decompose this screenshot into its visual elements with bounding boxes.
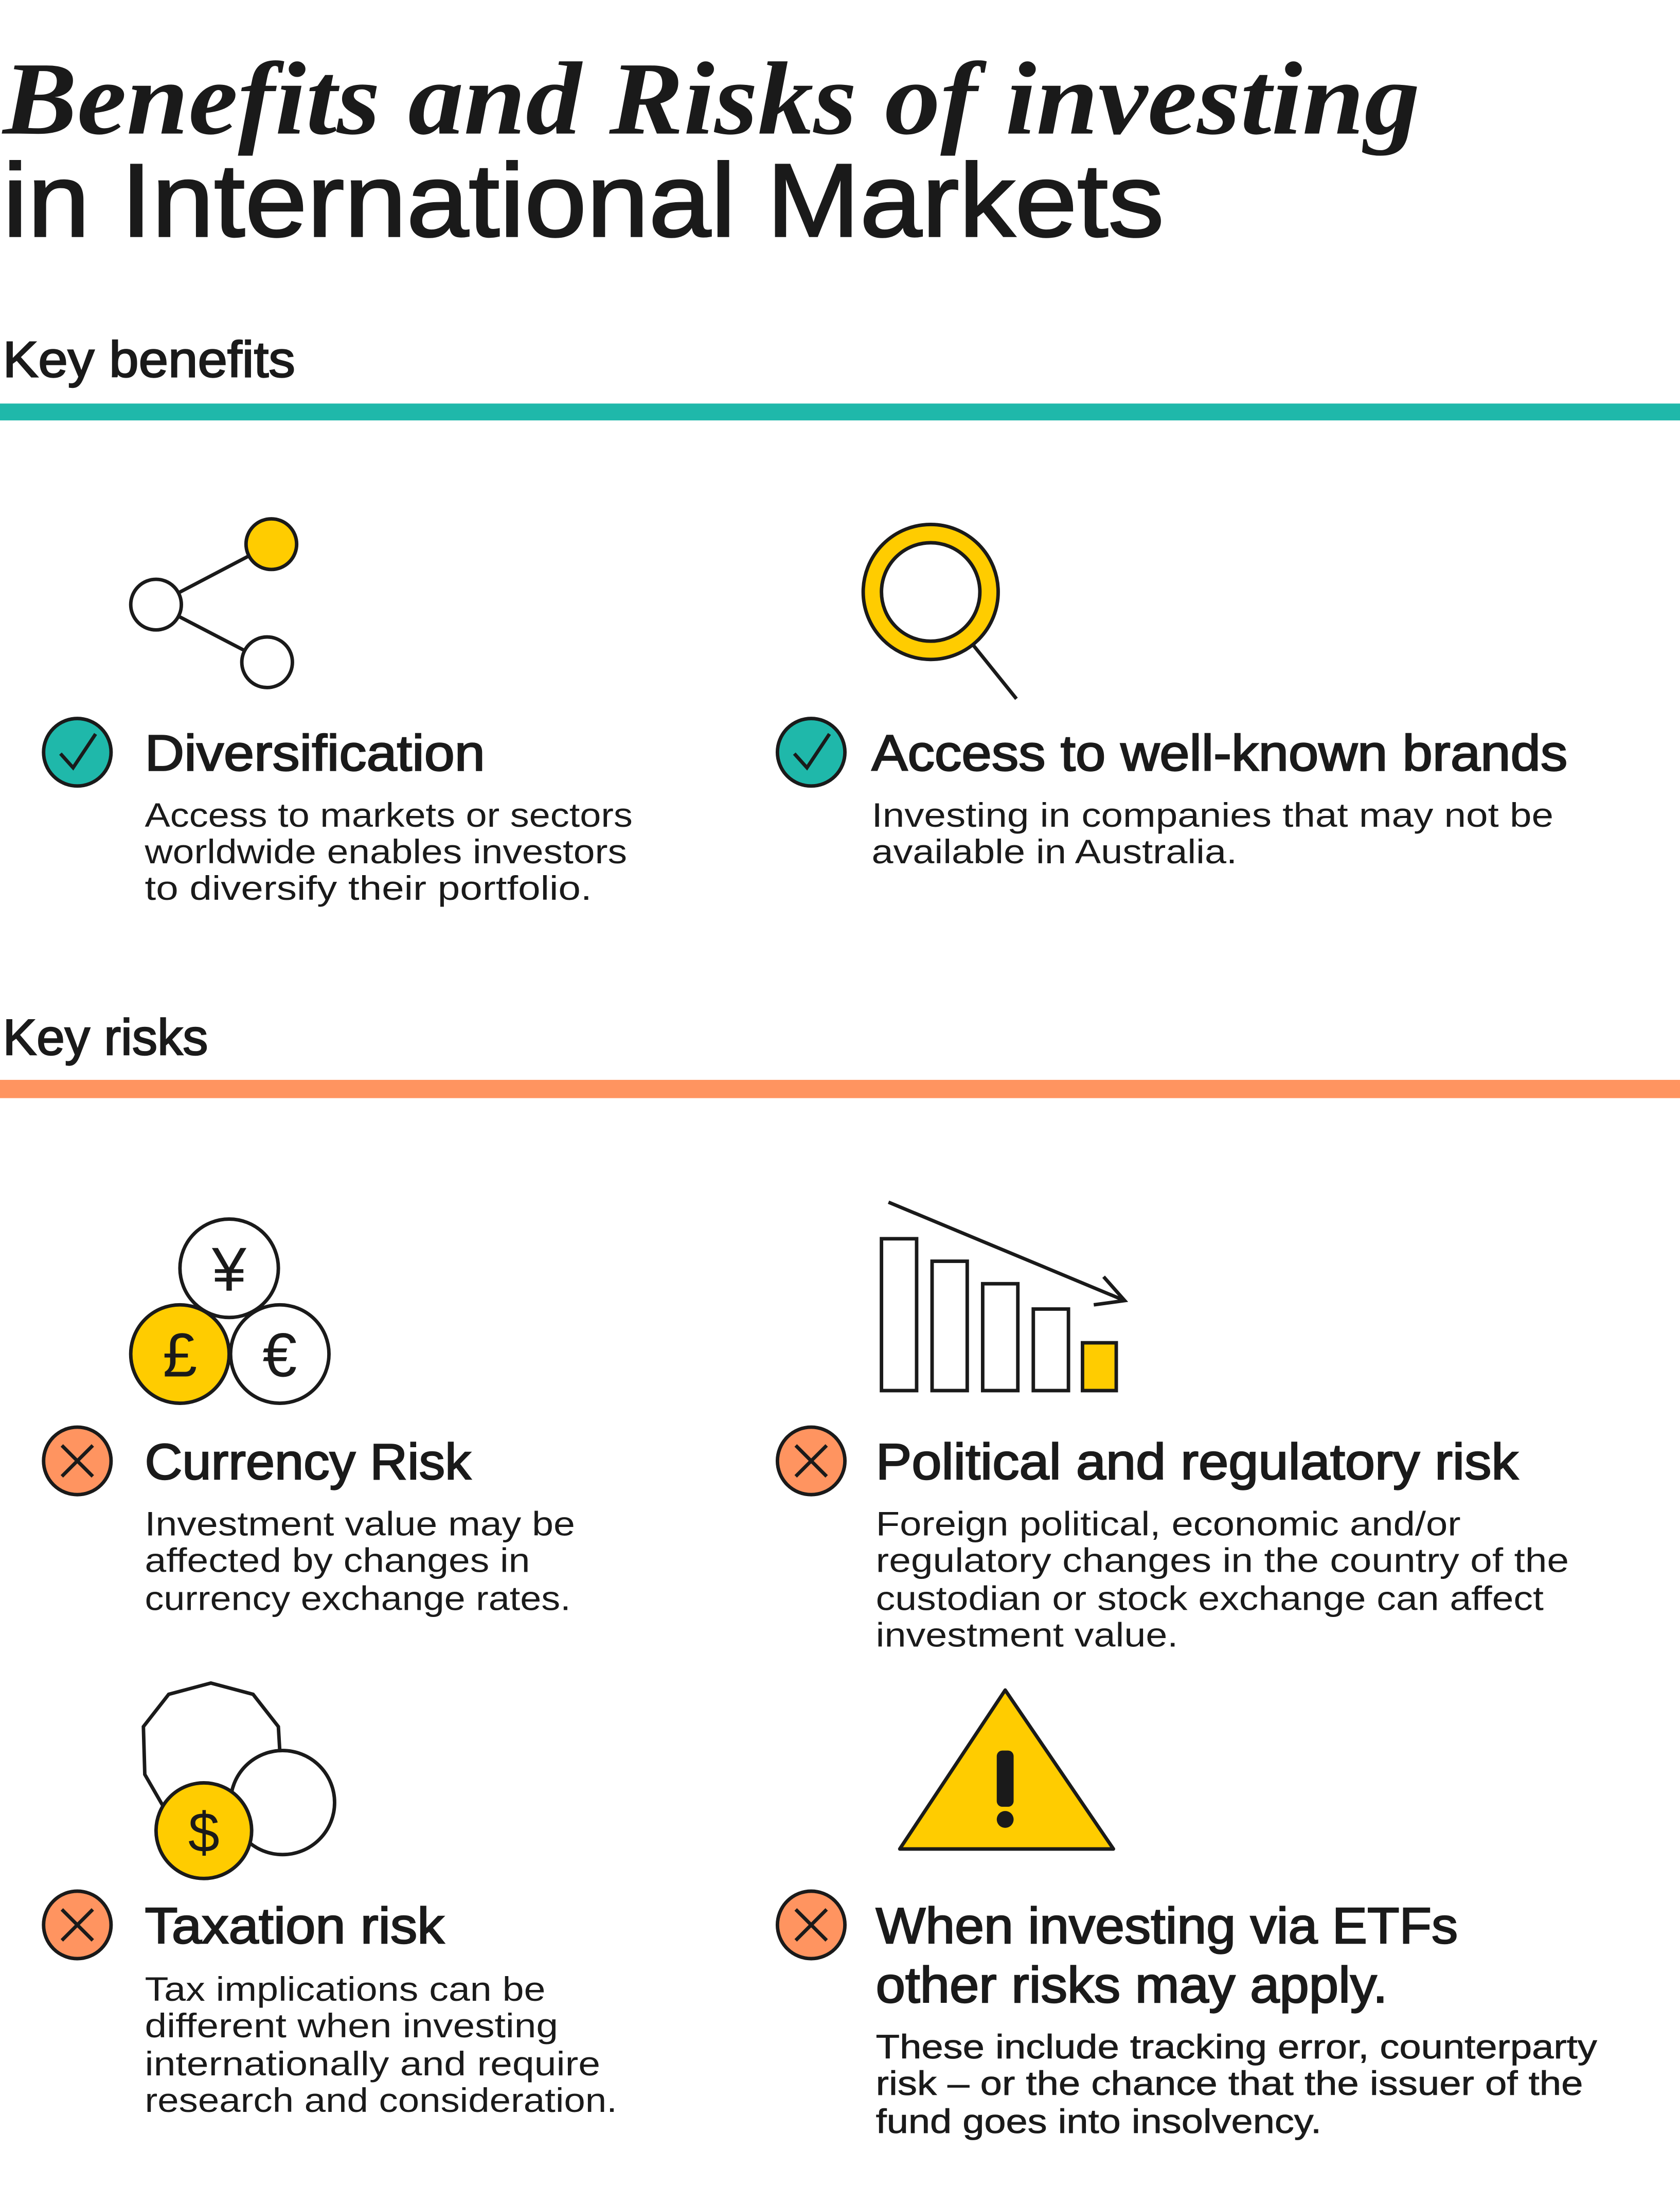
icon: cross [44,1891,111,1959]
risk: political: Foreign political, economic and/or [876,1505,1461,1542]
benefit: diversification: worldwide enables investors [144,833,627,870]
heading: key benefits: Key benefits [3,331,295,387]
risk: currency: Currency Risk [145,1433,471,1490]
risk: etfs [777,1891,1597,2140]
risk: etfs: risk – or the chance that the issuer of the [876,2065,1583,2102]
risk: currency: Investment value may be [145,1505,575,1542]
risk: political: Political and regulatory risk [876,1433,1519,1490]
benefit: diversification: to diversify their portfolio. [145,869,592,907]
orange bar [0,1080,1680,1098]
benefit: diversification: Diversification [145,725,485,781]
icon: warning [900,1690,1114,1849]
icon: coins tax [144,1683,334,1878]
benefit: brands: Access to well-known brands [871,725,1567,781]
benefit: diversification: Access to markets or sectors [145,796,633,834]
icon: currencies [131,1219,329,1403]
risk: political: investment value. [876,1616,1178,1654]
title: Benefits and Risks of investing [2,41,1420,156]
icon: check [44,719,111,786]
risk: political: regulatory changes in the country of the [876,1542,1569,1579]
icon: currencies: € [262,1321,297,1390]
benefit: brands [777,719,1567,870]
benefit: brands: Investing in companies that may not be [871,796,1553,834]
risk: taxation: Tax implications can be [145,1970,545,2008]
heading: key risks: Key risks [3,1009,208,1065]
icon: check [777,719,845,786]
risk: currency [44,1427,575,1617]
benefit: diversification [44,719,633,907]
risk: taxation: research and consideration. [145,2082,617,2119]
icon: cross [777,1427,845,1495]
risk: taxation: Taxation risk [145,1897,445,1954]
icon: share [131,519,297,687]
icon: magnifier [863,524,1016,699]
risk: political: custodian or stock exchange can affect [876,1579,1544,1617]
icon: coins tax: $ [188,1801,220,1864]
title [2,41,1420,258]
risk: taxation: different when investing [145,2007,558,2045]
risk: etfs: When investing via ETFs [876,1897,1458,1954]
risk: currency: currency exchange rates. [145,1579,571,1617]
icon: currencies: ¥ [211,1235,247,1304]
teal bar [0,403,1680,420]
icon: bar chart [882,1202,1124,1391]
risk: taxation [44,1891,617,2119]
risk: etfs: fund goes into insolvency. [876,2103,1321,2140]
risk: political [777,1427,1569,1654]
risk: taxation: internationally and require [145,2045,600,2083]
icon: cross [777,1891,845,1959]
icon: cross [44,1427,111,1495]
risk: etfs: other risks may apply. [876,1957,1388,2013]
title: in International Markets [3,142,1164,258]
risk: etfs: These include tracking error, counterparty [876,2028,1597,2066]
benefit: brands: available in Australia. [871,833,1237,870]
icon: currencies: £ [163,1321,197,1390]
risk: currency: affected by changes in [145,1542,530,1579]
